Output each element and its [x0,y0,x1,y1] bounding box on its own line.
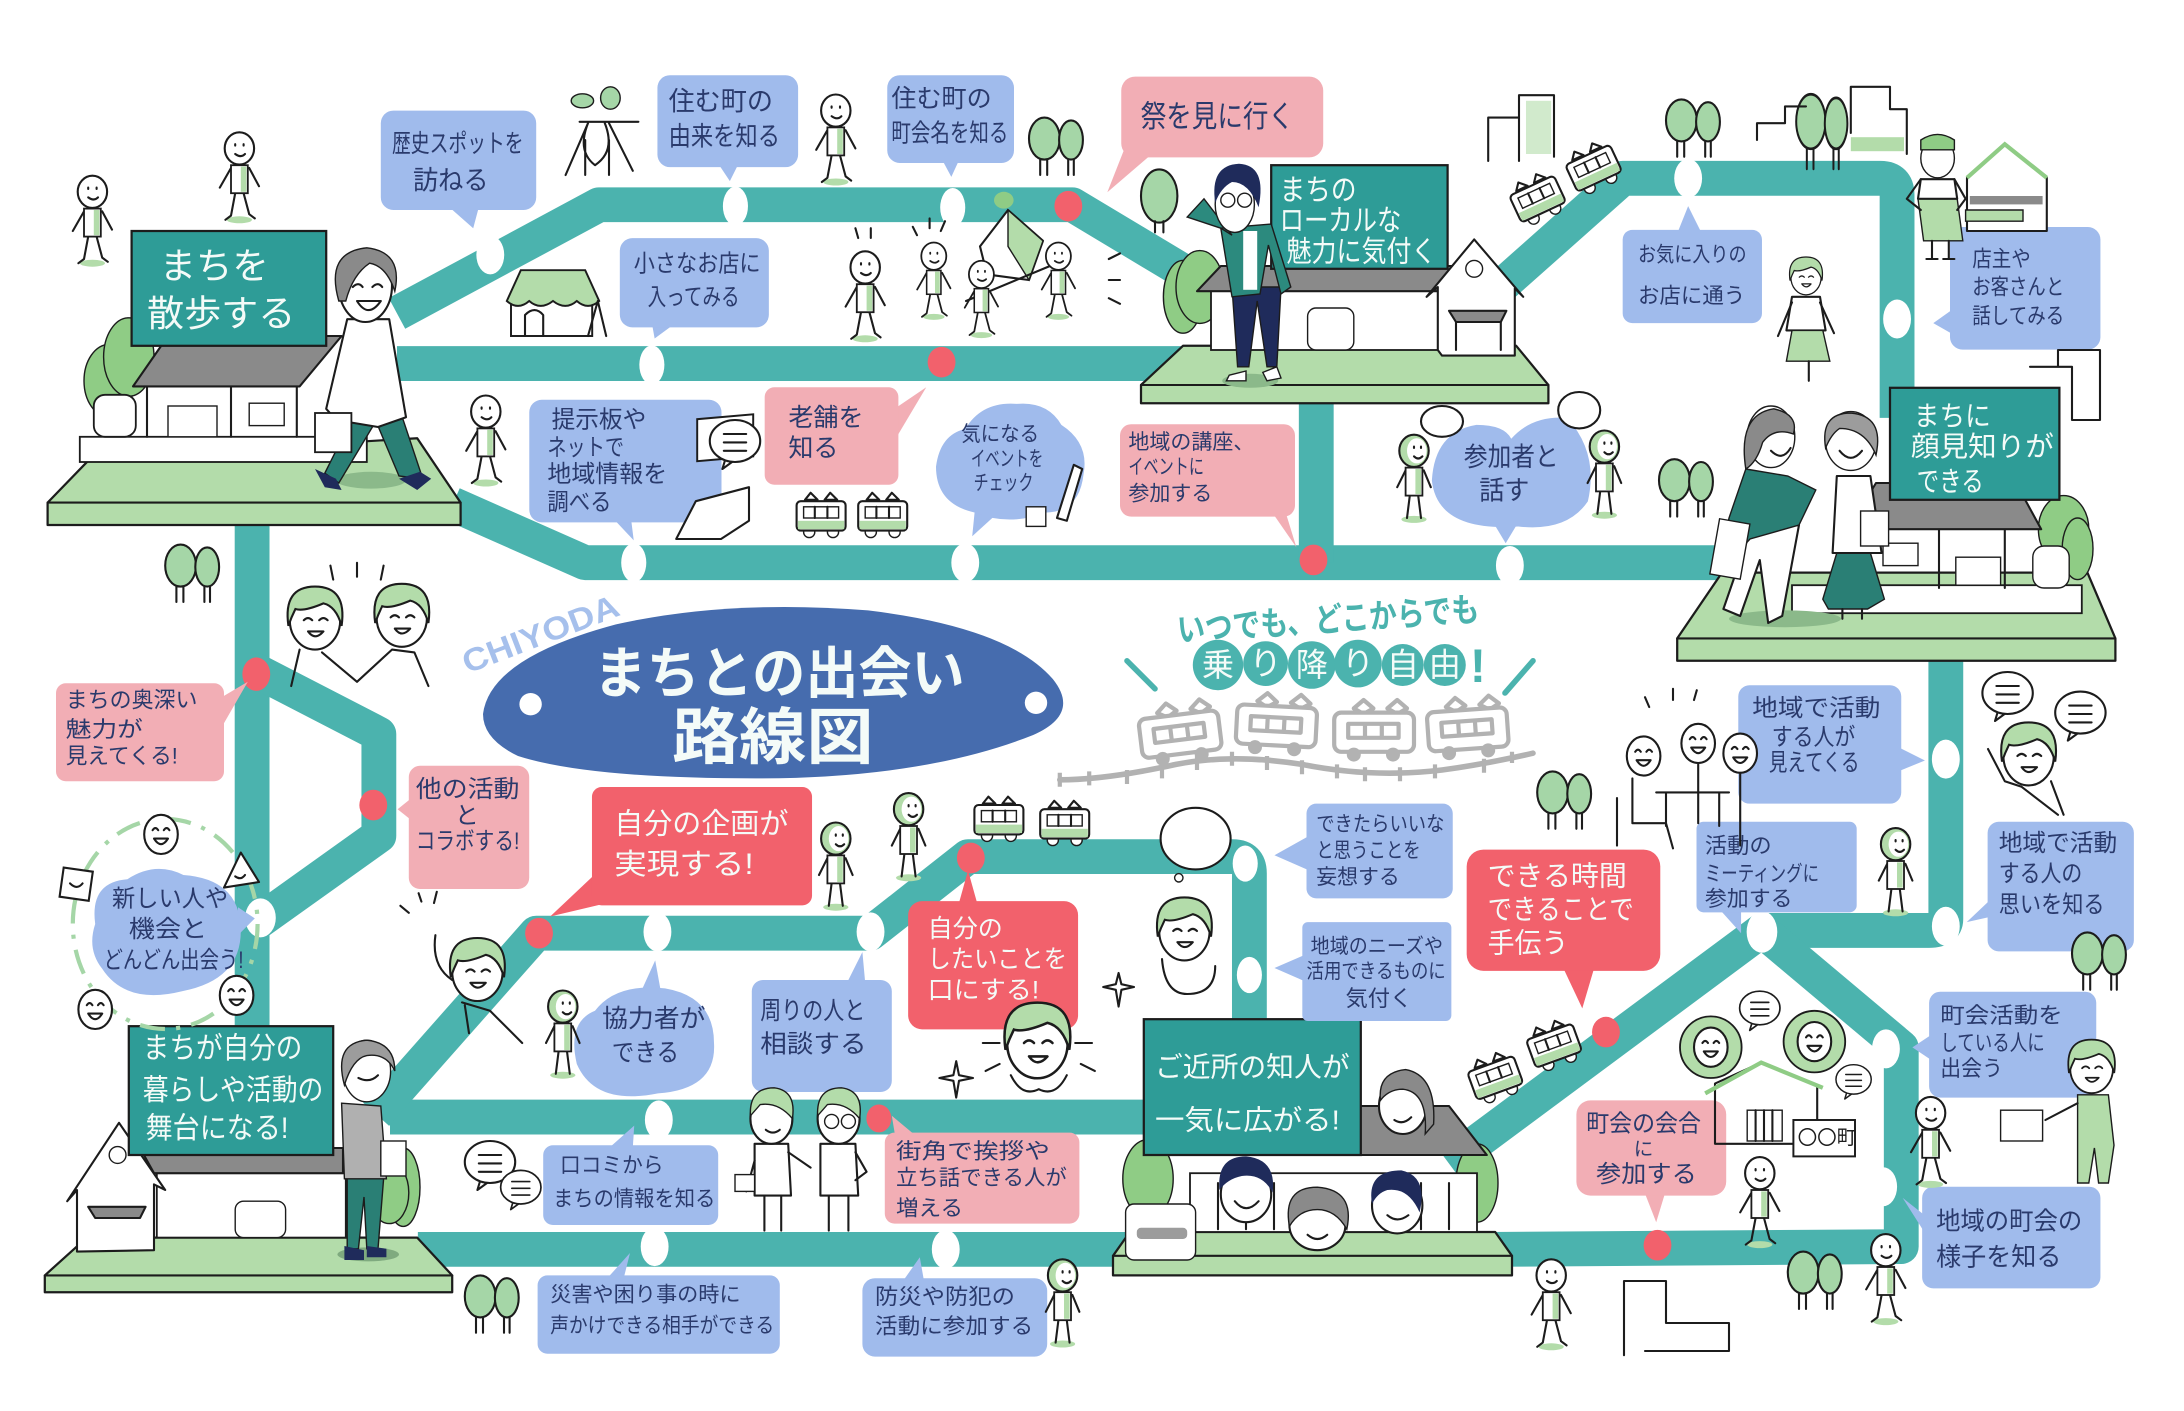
station: ご近所の知人が一気に広がる [1113,1019,1512,1275]
older man [337,1040,406,1261]
speech bubble: できたらいいな [1274,804,1453,898]
sign: まちを散歩する [132,231,326,346]
speech bubble: ミーティング: 参加する [1705,886,1793,911]
bush [2038,496,2093,580]
title [483,607,1063,778]
slogan [1060,591,1533,787]
speech bubble: 相談 [752,952,892,1092]
speech bubble: 町会活動: 町会活動を [1940,1003,2063,1028]
speech bubble: 由来: 住む町の [669,87,773,117]
title text: まちとの出会い [594,642,965,705]
sign: まちのローカルな魅力に気付く: まちの [1280,174,1357,207]
slogan circles [1193,640,1486,693]
stations on the lines [242,159,1960,1269]
speech bubble: 新しい人: どんどん出会う! [104,947,244,974]
speech bubble: できたらいいな: と思うことを [1316,840,1421,863]
speech bubble: 口コミ: まちの情報を知る [553,1186,715,1211]
sign: まちのローカルな魅力に気付く: ローカルな [1280,205,1401,238]
festival portable shrine group [855,192,1120,338]
speech bubble: 奥深い魅力 [56,682,248,781]
CHIYODA label: CHIYODA [457,588,624,680]
speech bubble: お気に入り: お店に通う [1638,283,1745,308]
speech bubble: 街角: 立ち話できる人が [896,1165,1067,1190]
speech bubble: 町会の様子 [1903,1187,2100,1288]
speech bubble: 提示板: 調べる [547,490,611,516]
speech bubble: 町会の様子: 地域の町会の [1936,1208,2082,1236]
speech bubble: ミーティング: 活動の [1705,833,1772,858]
speech bubble: 町会の会合: に [1634,1138,1653,1160]
speech bubble: 災害: 災害や困り事の時に [550,1283,741,1306]
speech bubble: 提示板: ネットで [547,435,624,461]
speech bubble: 災害 [538,1253,780,1354]
speech bubble: 講座: イベントに [1128,456,1204,479]
slogan circles: 由 [1429,647,1461,683]
city buildings [1488,87,2100,1355]
speech bubble: 企画 [550,787,812,916]
speech bubble: 参加者と話す: 参加者と [1464,442,1559,472]
speech bubble: 店主: 話してみる [1972,304,2064,329]
speech bubble: 地域で活動する人が: 見えてくる [1769,750,1859,776]
speech bubble: 店主: お客さんと [1972,274,2064,299]
bushes [1163,251,1224,333]
cheering person [400,892,522,1043]
dreaming person [1103,808,1231,1007]
speech bubble: 老舗 [765,387,926,485]
bush [370,1148,420,1226]
speech bubble: 街角 [885,1116,1079,1224]
talking person with speech bubbles [1982,672,2106,815]
speech bubble: 参加者と話す: 話す [1479,475,1529,505]
speech bubble: 講座: 参加する [1128,483,1212,506]
speech bubble: 気になるイベント [936,404,1085,536]
sign: まちに顔見知りができる: 顔見知りが [1911,431,2054,462]
community hall and faces: 〇〇町 [1798,1127,1856,1149]
sign: 舞台: まちが自分の [143,1032,302,1065]
speech bubble: ミーティング: ミーティングに [1705,861,1819,886]
speech bubble: 思いを知る: 思いを知る [1999,891,2105,918]
station: まちに顔見知りができる [1677,388,2115,661]
sign: 舞台 [129,1026,333,1155]
bushes [84,318,154,417]
speech bubble: 奥深い魅力: 見えてくる! [66,743,178,768]
sign: まちに顔見知りができる: できる [1917,466,1984,497]
speech bubble: 参加者と話す [1432,418,1591,543]
speech bubble: 歴史スポット [381,111,536,228]
slogan line: いつでも、どこからでも [1176,591,1480,650]
slogan circles: 自 [1387,647,1419,683]
station: まちが自分の暮らしや活動の舞台になる [45,1026,452,1292]
speech bubble: 災害: 声かけできる相手ができる [550,1314,774,1337]
sign: まちに顔見知りができる: まちに [1914,400,1991,431]
sign: 舞台: 暮らしや活動の [143,1074,323,1107]
speech bubble: ニーズ: 活用できるものに [1307,960,1446,983]
slogan circles: ! [1470,640,1486,693]
friendly circle of faces [60,815,259,1029]
speech bubble: お気に入り [1623,206,1762,323]
shopkeeper and market stall [1907,134,2047,259]
sign: 舞台: 舞台になる! [146,1112,288,1145]
slogan circles: 降 [1296,647,1328,683]
speech bubble: 由来 [657,75,798,181]
station building [1126,1106,1487,1260]
small trains [797,137,1625,1107]
community hall and faces [1680,991,1871,1156]
speech bubble: ニーズ: 地域のニーズや [1311,935,1443,958]
station building [80,336,367,462]
speech bubble: 防災: 防災や防犯の [875,1284,1015,1309]
girl figure [1778,257,1834,381]
excited person [939,1003,1095,1098]
track network [252,178,1946,1249]
station building [67,1123,346,1252]
chat bubbles icon [465,1141,541,1210]
speech bubble: 祭 [1107,77,1323,192]
person with flag [2001,1040,2115,1183]
sign: まちに顔見知りができる [1890,388,2059,500]
two men talking [735,1088,867,1231]
blank speech bubbles [1421,392,1600,437]
speech bubble: 気になるイベント: チェック [974,472,1034,495]
title text: 路線図 [672,703,874,772]
speech bubble: 小さなお店 [620,238,769,338]
speech bubble: 由来: 由来を知る [669,121,780,151]
speech bubble: 歴史スポット: 訪ねる [413,166,489,196]
speech bubble: 新しい人: 新しい人や [112,885,228,912]
speech bubble: 気になるイベント: イベントを [971,448,1043,471]
speech bubble: 地域で活動する人が: する人が [1772,724,1856,751]
speech bubble: 町会活動 [1912,992,2096,1098]
speech bubble: 相談: 周りの人と [760,997,865,1025]
speech bubble: 町会名: 町会名を知る [891,120,1008,148]
speech bubble: 小さなお店: 入ってみる [648,285,740,311]
tree groups [165,94,2126,1333]
platform [1113,1232,1512,1275]
slogan circles: 乗 [1202,647,1234,683]
gray trains [1060,692,1533,787]
speech bubble: 店主: 店主や [1972,247,2031,272]
speech bubble: したいこと [908,871,1078,1029]
speech bubble: コラボ: と [455,803,479,830]
speech bubble: 街角: 街角で挨拶や [896,1138,1050,1163]
walking man [315,248,431,490]
meeting group [1617,689,1757,848]
speech bubble: お気に入り: お気に入りの [1638,243,1747,266]
speech bubble: 町会名 [887,75,1014,177]
two women talking [1710,406,1889,627]
speech bubble: 町会の会合: 町会の会合 [1586,1111,1701,1138]
sign: まちのローカルな魅力に気付く [1271,165,1448,269]
speech bubble: 協力者: 協力者が [602,1005,706,1033]
speech bubble: 思いを知る: する人の [1999,862,2082,888]
small walking figures [73,94,1950,1350]
station: まちのローカルな魅力に気付く [1141,164,1548,403]
sign: 一気に広がる [1144,1019,1361,1155]
thinking man [1187,164,1291,388]
speech bubble: 新しい人: 機会と [129,916,207,943]
shop icon [507,270,606,336]
speech bubble: できる時間: できる時間 [1488,861,1627,892]
speech bubble: 提示板 [529,400,722,540]
speech bubble: 協力者 [574,960,714,1096]
speech bubble: 協力者: できる [612,1039,679,1067]
slogan circles: り [1250,646,1282,682]
platform [48,438,461,525]
speech bubble: 老舗: 知る [788,434,839,462]
speech bubble: 町会の様子: 様子を知る [1936,1243,2061,1272]
speech bubble: 提示板: 地域情報を [547,461,667,488]
speech bubble: 気になるイベント: 気になる [961,423,1039,446]
speech bubble: 町会の会合: 参加する [1596,1161,1697,1188]
speech bubble: 講座 [1120,424,1296,547]
speech bubble: できる時間: できることで [1488,894,1634,925]
speech bubble: 老舗: 老舗を [788,404,864,432]
sign: 一気に広がる: 一気に広がる! [1155,1104,1340,1135]
speech bubble: 街角: 増える [896,1196,963,1221]
sign: まちのローカルな魅力に気付く: 魅力に気付く [1287,235,1436,268]
speech bubble: 相談: 相談する [760,1030,867,1058]
sign: まちを散歩する: まちを [160,245,269,286]
speech bubble: 町会名: 住む町の [891,85,992,113]
speech bubble: 祭: 祭を見に行く [1141,100,1294,134]
speech bubble: 企画: 自分の企画が [614,808,788,841]
speech bubble: コラボ: コラボする! [416,828,519,855]
title oval [483,607,1063,778]
platform [1677,573,2115,661]
speech bubble: 口コミ: 口コミから [560,1152,664,1177]
four neighbours [1219,1070,1434,1250]
speech bubble: 小さなお店: 小さなお店に [634,251,761,278]
speech bubble: 口コミ [543,1126,718,1225]
platform [45,1238,452,1292]
speech bubble: 新しい人 [92,869,255,995]
slogan circles: り [1342,646,1374,682]
monument icon [566,87,638,175]
speech bubble: 町会の会合 [1576,1100,1726,1222]
speech bubble: 防災: 活動に参加する [875,1313,1033,1338]
speech bubble: 思いを知る [1967,822,2134,951]
speech bubble: 防災 [862,1257,1047,1357]
bushes [1123,1140,1498,1222]
speech bubble: 町会活動: している人に [1940,1031,2045,1056]
title dots [519,692,1047,715]
speech bubble: 講座: 地域の講座、 [1128,431,1254,454]
laptop and message icon [676,414,760,539]
speech bubble: 地域で活動する人が [1738,685,1925,804]
speech bubble: したいこと: したいことを [928,946,1067,974]
station: start, まちを散歩する [48,231,461,525]
speech bubble: ニーズ: 気付く [1346,986,1412,1011]
speech bubble: 歴史スポット: 歴史スポットを [392,130,524,158]
speech bubble: コラボ [398,766,529,889]
handshake pair [288,563,429,686]
title text [594,642,965,772]
speech bubble: 提示板: 提示板や [552,407,646,434]
speech bubble: 奥深い魅力: まちの奥深い [66,687,197,712]
speech bubble: ミーティング [1697,822,1857,933]
platform [1141,346,1548,403]
sign: 一気に広がる: ご近所の知人が [1155,1051,1350,1082]
speech bubble: できる時間: 手伝う [1488,927,1568,958]
speech bubble: できる時間 [1467,850,1660,1008]
speech bubble: できたらいいな: 妄想する [1316,866,1400,889]
speech bubble: 店主 [1933,227,2100,350]
speech bubble: できたらいいな: できたらいいな [1316,813,1444,836]
speech bubble: ニーズ [1274,922,1451,1021]
speech bubble: したいこと: 自分の [928,915,1003,943]
speech bubble: 地域で活動する人が: 地域で活動 [1752,695,1880,722]
sign: まちを散歩する: 散歩する [147,293,295,334]
station building [1792,483,2082,613]
speech bubble: コラボ: 他の活動 [416,776,519,803]
speech bubble: 町会活動: 出会う [1940,1056,2003,1081]
speech bubble: 企画: 実現する! [614,848,754,881]
pencil and checklist icon [1026,465,1082,526]
speech bubble: 思いを知る: 地域で活動 [1999,830,2117,857]
speech bubble: 奥深い魅力: 魅力が [66,717,143,742]
speech bubble: したいこと: 口にする! [928,976,1039,1004]
station building [1197,239,1523,356]
